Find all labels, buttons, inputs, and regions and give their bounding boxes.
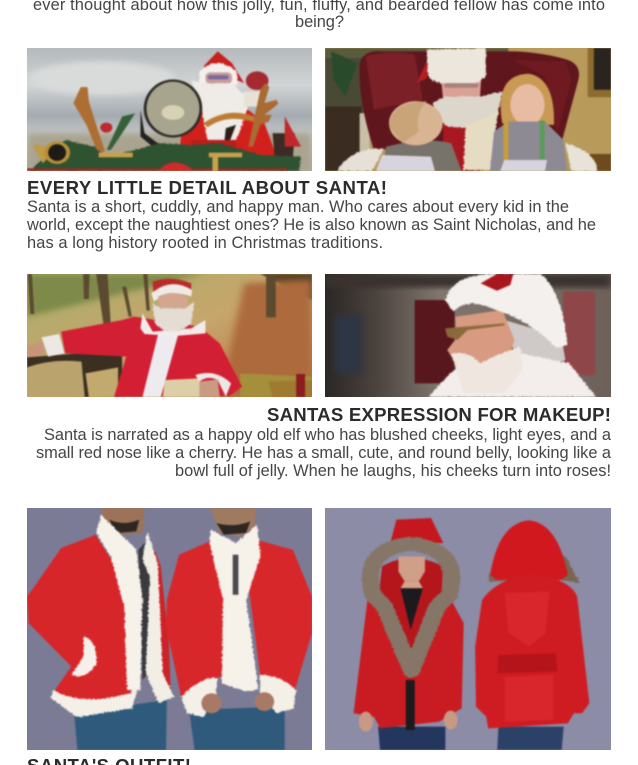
paragraph: santas expression: bowl full of jelly. When he laughs, his cheeks turn into roses! (175, 462, 611, 480)
paragraph: santas expression (36, 426, 612, 480)
paragraph: santas expression: Santa is narrated as a happy old elf who has blushed cheeks, light eyes, and a (44, 426, 612, 444)
santa (61, 317, 242, 397)
photo: santa seated in vineyard (27, 274, 312, 397)
photo: red leather hooded coat (325, 508, 611, 750)
paragraph: every little detail: has a long history rooted in Christmas traditions. (27, 234, 383, 252)
face (447, 310, 514, 373)
antlers (73, 87, 105, 153)
paragraph: every little detail: world, except the naughtiest ones? He is also known as Saint Nicholas, and he (26, 216, 596, 234)
paragraph: every little detail (26, 198, 596, 252)
heading: santas expression: SANTAS EXPRESSION FOR MAKEUP! (267, 404, 611, 425)
intro text (33, 0, 605, 31)
girl (501, 74, 554, 125)
front coat (378, 727, 445, 750)
heading: every little detail: EVERY LITTLE DETAIL ABOUT SANTA! (27, 177, 387, 198)
left figure (74, 700, 167, 750)
photo: santa on parade sleigh (27, 48, 312, 171)
santa (179, 104, 277, 157)
garland (31, 140, 301, 171)
intro text: being? (295, 13, 344, 31)
gift box (268, 380, 312, 397)
paragraph: santas expression: small red nose like a cherry. He has a small, cute, and round belly, looking like a (36, 444, 612, 462)
back coat (497, 727, 564, 750)
spotlight (144, 79, 202, 138)
photo: santa profile close-up (325, 274, 611, 397)
beard and shoulders (504, 320, 565, 373)
hat (445, 274, 567, 348)
photo: red jacket with white fur (27, 508, 312, 750)
chair (359, 51, 579, 150)
paragraph: every little detail: Santa is a short, cuddly, and happy man. Who cares about every kid in the (27, 198, 569, 216)
baby (382, 141, 461, 171)
sofa (27, 350, 122, 397)
photo: santa with two children (325, 48, 611, 171)
santa (443, 123, 480, 171)
right figure (189, 707, 285, 750)
